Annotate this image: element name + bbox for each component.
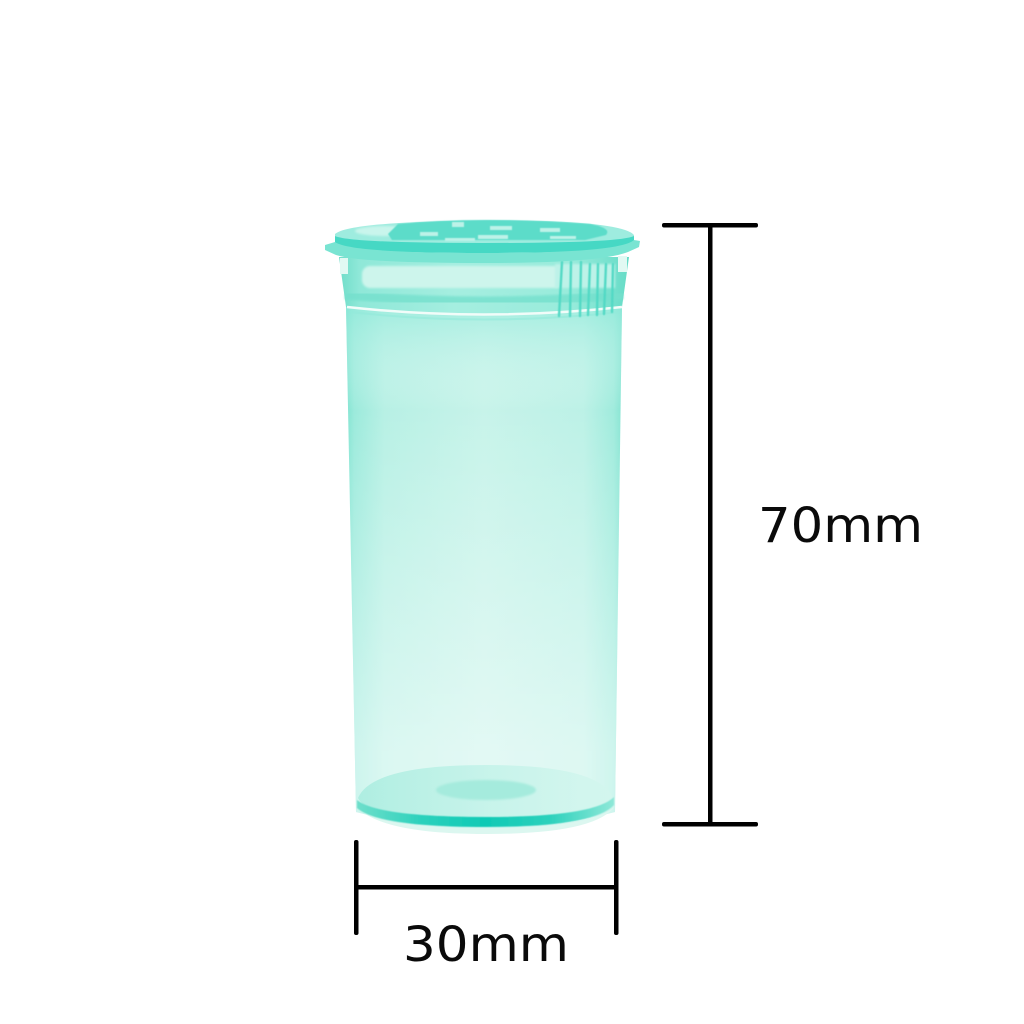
vial body — [346, 306, 622, 829]
vial neck — [339, 256, 629, 320]
vial cap — [325, 220, 640, 263]
label: width 30mm: 30mm — [403, 917, 569, 973]
width dimension line — [354, 840, 618, 935]
vial base — [356, 765, 615, 834]
vial ribs — [559, 262, 613, 316]
height dimension line — [662, 223, 758, 826]
vial — [325, 220, 640, 834]
label: height 70mm: 70mm — [758, 498, 923, 554]
